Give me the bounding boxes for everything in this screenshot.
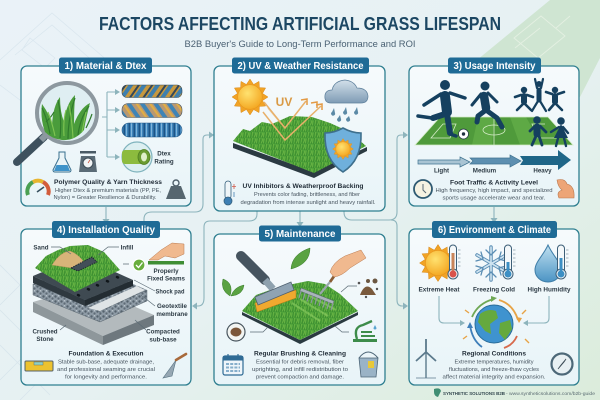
icon: wind turbine: [416, 339, 436, 378]
fitness group: [515, 79, 564, 111]
heading: maintenance: 5) Maintenance: [264, 229, 336, 240]
panel: 3 usage intensity: [409, 58, 579, 206]
layer labels: [32, 244, 188, 344]
connectors to globe: [439, 296, 549, 326]
label: dtex rating: Rating: [154, 158, 174, 166]
text: foundation: Stable sub-base, adequate drainage,: [58, 360, 154, 366]
intensity labels: Medium: [473, 168, 497, 174]
icon: seam check: [133, 259, 145, 271]
icon: spirit level: [25, 361, 53, 371]
icon: fibre ropes: [122, 85, 182, 137]
heading: material: 1) Material & Dtex: [64, 61, 147, 72]
layer labels: Shock pad: [156, 288, 185, 296]
heading: maintenance: [259, 226, 341, 242]
panel: 5 maintenance: [214, 226, 385, 385]
icon: magnifier with grass: [17, 83, 97, 162]
heading: uv: [232, 58, 369, 74]
text: regional conditions: Regional Conditions: [462, 350, 526, 358]
layer labels: Crushed: [32, 328, 58, 336]
text: polymer quality: Nylon) = Greater Resilience & Durability.: [54, 195, 157, 201]
layer labels: Sand: [33, 244, 49, 252]
text: polymer quality: Polymer Quality & Yarn Thickness: [54, 179, 162, 186]
icon: flask: [53, 152, 71, 172]
layer labels: Compacted: [146, 328, 180, 336]
text: regional conditions: affect material integrity and expansion.: [442, 374, 546, 380]
panel: 2 uv and weather: [214, 58, 385, 211]
label: dtex rating: [154, 150, 174, 166]
heading: usage: 3) Usage Intensity: [454, 61, 536, 72]
text: polymer quality: [54, 179, 162, 201]
climate labels: Freezing Cold: [473, 286, 515, 294]
panel: 1 material and dtex: [17, 58, 191, 206]
panel: 6 environment and climate: [409, 221, 579, 385]
icon: leaves: [222, 248, 310, 296]
icon: trowel: [163, 354, 186, 378]
icon: calendar: [223, 354, 243, 375]
heading: installation: [52, 221, 160, 238]
label: fixed seams: Properly: [153, 268, 179, 275]
heading: environment: [432, 221, 557, 238]
thermometer: cold: [503, 245, 516, 279]
turf layer with sand and infill: [35, 245, 120, 292]
text: brushing: [252, 350, 349, 380]
icon: rain cloud: [325, 80, 368, 122]
text: regional conditions: Extreme temperatures, humidity: [454, 360, 534, 366]
children silhouettes: [530, 116, 568, 146]
intensity labels: Heavy: [533, 168, 552, 174]
text: uv inhibitors: UV Inhibitors & Weatherproof Backing: [242, 183, 364, 190]
layer labels: Geotextile: [157, 303, 188, 310]
footer: brand and url: [434, 388, 595, 397]
label: dtex rating: Dtex: [157, 150, 171, 158]
footer: brand and url: SYNTHETIC SOLUTIONS B2B: [443, 391, 505, 397]
heading: uv: 2) UV & Weather Resistance: [238, 61, 364, 72]
text: uv inhibitors: degradation from intense sunlight and heavy rainfall.: [240, 200, 376, 206]
heading: material: [59, 58, 152, 74]
layer labels: sub-base: [149, 336, 177, 344]
icon: football: [458, 129, 468, 139]
connector arrows between panels: [102, 132, 498, 310]
icon: compass gauge: [552, 354, 572, 374]
text: foundation: for longevity and performance.: [65, 374, 147, 380]
text: foot traffic: Foot Traffic & Activity Level: [450, 180, 538, 186]
icon: sun: [232, 79, 268, 115]
heading: usage: [448, 58, 541, 74]
text: polymer quality: Higher Dtex & premium materials (PP, PE,: [55, 188, 161, 194]
climate labels: [418, 286, 571, 294]
icon: weight: [166, 180, 186, 199]
climate labels: High Humidity: [528, 286, 571, 294]
icon: dtex rating yarn: [122, 142, 152, 172]
layer labels: membrane: [156, 311, 188, 318]
text: regional conditions: fluctuations, and freeze-thaw cycles: [449, 367, 539, 373]
panel: 4 installation quality: [21, 221, 191, 385]
icon: clock: [414, 180, 432, 198]
footer: brand and url: - www.syntheticsolutions.com/b2b-guide: [506, 391, 595, 397]
fibre branch lines: [102, 89, 120, 160]
text: foot traffic: High frequency, high impact, and specialized: [436, 188, 552, 194]
icon: globe with cycle arrows: [463, 296, 529, 348]
icon: shield: [325, 128, 361, 172]
text: uv inhibitors: Prevents color fading, brittleness, and fiber: [254, 192, 360, 198]
icon: hand on seam: [148, 243, 184, 264]
text: foundation: and professional seaming are crucial: [57, 367, 155, 373]
icon: gauge: [27, 181, 49, 195]
text: foundation: [57, 350, 155, 380]
uv rays: UV: [276, 95, 292, 109]
text: foot traffic: [436, 180, 552, 202]
icon: extreme heat: [420, 245, 460, 281]
icon: rake and hand: [299, 250, 366, 310]
intensity labels: [434, 168, 552, 174]
icon: hose: [335, 321, 377, 342]
layer labels: Infill: [121, 244, 134, 252]
ground layers: [33, 256, 154, 345]
icon: thermometer: [224, 181, 236, 205]
icon: flexed arm: [557, 180, 574, 198]
text: uv inhibitors: [240, 183, 376, 206]
icon: scale: [79, 151, 97, 172]
heading: installation: 4) Installation Quality: [57, 225, 155, 236]
icon: brush: [241, 256, 296, 312]
uv rays: [263, 95, 322, 140]
subtitle: B2B Buyer's Guide to Long-Term Performance and ROI: [184, 39, 416, 49]
icon: freezing cold: [476, 247, 506, 280]
icon: high humidity: [535, 245, 568, 282]
label: fixed seams: [147, 268, 185, 282]
title: FACTORS AFFECTING ARTIFICIAL GRASS LIFESPAN: [99, 14, 501, 34]
text: regional conditions: [442, 350, 546, 380]
sports pitch: [415, 117, 573, 145]
text: brushing: uprighting, and infill redistribution to: [252, 367, 349, 373]
text: foot traffic: sports usage accelerate wear and tear.: [442, 196, 546, 202]
icon: debris removal: [341, 278, 378, 298]
text: foundation: Foundation & Execution: [68, 350, 144, 358]
intensity labels: Light: [434, 168, 449, 174]
heading: environment: 6) Environment & Climate: [438, 225, 551, 236]
icon: bucket: [359, 352, 378, 377]
text: brushing: Regular Brushing & Cleaning: [254, 350, 346, 358]
label: fixed seams: Fixed Seams: [147, 276, 185, 282]
icon: no debris: [227, 323, 268, 341]
text: brushing: Essential for debris removal, fiber: [256, 360, 344, 366]
text: brushing: prevent compaction and damage.: [256, 374, 344, 380]
intensity arrows: [418, 150, 571, 170]
player silhouettes: [418, 80, 502, 136]
turf block: [233, 116, 367, 178]
climate labels: Extreme Heat: [418, 286, 460, 294]
turf square: [242, 281, 358, 344]
layer labels: Stone: [36, 336, 54, 343]
